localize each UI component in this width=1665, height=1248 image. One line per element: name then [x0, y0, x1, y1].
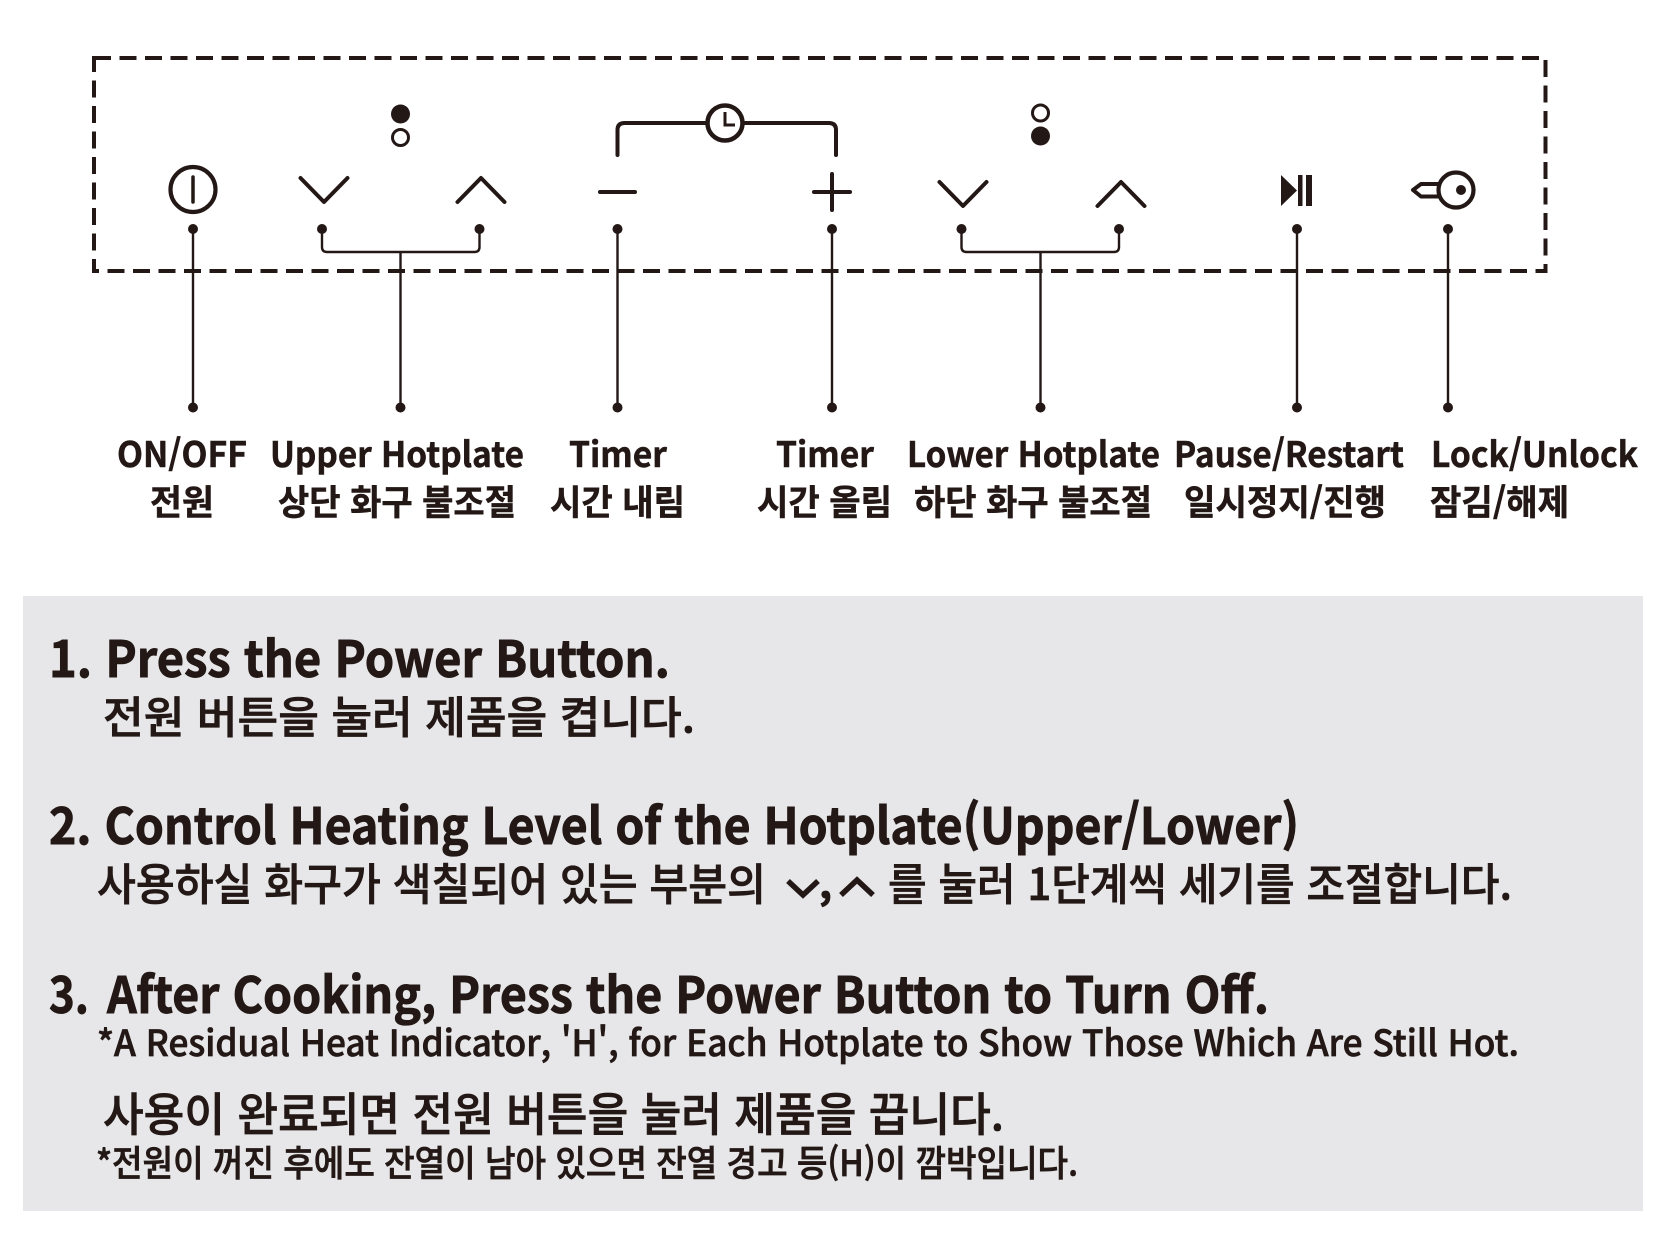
label: on/off: 전원	[150, 475, 214, 526]
step 3 heading: After Cooking, Press the Power Button to Turn Off.	[106, 956, 1269, 1028]
step 1 heading: 1. Press the Power Button.	[49, 620, 670, 692]
panel: instructions	[23, 596, 1643, 1211]
label: lower hotplate: 하단 화구 불조절	[914, 475, 1152, 526]
label: lock/unlock: 잠김/해제	[1430, 475, 1569, 526]
leader: lower hotplate	[956, 224, 1124, 412]
label: timer up	[757, 427, 892, 526]
icon: lock key	[1413, 172, 1474, 208]
icon: lower heat down chevron	[940, 182, 986, 206]
label: lock/unlock: Lock/Unlock	[1431, 427, 1638, 478]
label: upper hotplate	[270, 427, 524, 526]
step 2 korean text: 를 눌러 1단계씩 세기를 조절합니다.	[888, 849, 1512, 913]
icon: timer bracket with clock	[618, 106, 836, 155]
leader: upper hotplate	[317, 224, 484, 412]
icon: power button	[170, 167, 216, 212]
icon: upper hotplate indicator	[391, 104, 410, 146]
leader: pause	[1292, 224, 1302, 412]
label: on/off: ON/OFF	[117, 427, 247, 478]
step 3 korean text: 사용이 완료되면 전원 버튼을 눌러 제품을 끕니다.	[103, 1079, 1004, 1145]
label: lower hotplate: Lower Hotplate	[907, 427, 1160, 478]
label: upper hotplate: 상단 화구 불조절	[278, 475, 516, 526]
step 2 korean text	[97, 849, 1512, 913]
leader: lock	[1443, 224, 1453, 412]
step 2 korean text: ,	[819, 852, 832, 910]
icon: upper heat down chevron	[300, 178, 348, 202]
leader: power	[188, 224, 198, 412]
step 2 korean text: 사용하실 화구가 색칠되어 있는 부분의	[97, 849, 766, 913]
label: pause/restart: 일시정지/진행	[1184, 475, 1386, 526]
label: timer up: 시간 올림	[757, 475, 892, 526]
label: pause/restart: Pause/Restart	[1174, 427, 1404, 478]
label: lower hotplate	[907, 427, 1160, 526]
label: timer down: Timer	[569, 427, 668, 478]
leader: timer down	[612, 224, 622, 412]
label: timer down	[550, 427, 685, 526]
label: pause/restart	[1174, 427, 1404, 526]
leader: timer up	[827, 224, 837, 412]
label: on/off	[117, 427, 247, 526]
step 1 korean text: 전원 버튼을 눌러 제품을 켭니다.	[103, 682, 695, 746]
label: timer down: 시간 내림	[550, 475, 685, 526]
icon: timer plus	[814, 174, 850, 210]
step 3 residual heat note: *A Residual Heat Indicator, 'H', for Each Hotplate to Show Those Which Are Still Hot.	[97, 1015, 1519, 1067]
icon: upper heat up chevron	[458, 178, 504, 202]
icon: timer minus	[600, 190, 635, 194]
label: timer up: Timer	[776, 427, 875, 478]
icon: pause and restart	[1281, 175, 1312, 206]
step 3 korean note: *전원이 꺼진 후에도 잔열이 남아 있으면 잔열 경고 등(H)이 깜박입니다.	[96, 1135, 1078, 1187]
step 2 heading: 2. Control Heating Level of the Hotplate(Upper/Lower)	[49, 787, 1299, 859]
dashed control panel outline	[94, 58, 1546, 271]
icon: lower hotplate indicator	[1031, 105, 1050, 146]
label: lock/unlock	[1430, 427, 1638, 526]
step 3 heading: 3.	[49, 956, 89, 1028]
icon: lower heat up chevron	[1098, 182, 1144, 206]
label: upper hotplate: Upper Hotplate	[270, 427, 524, 478]
